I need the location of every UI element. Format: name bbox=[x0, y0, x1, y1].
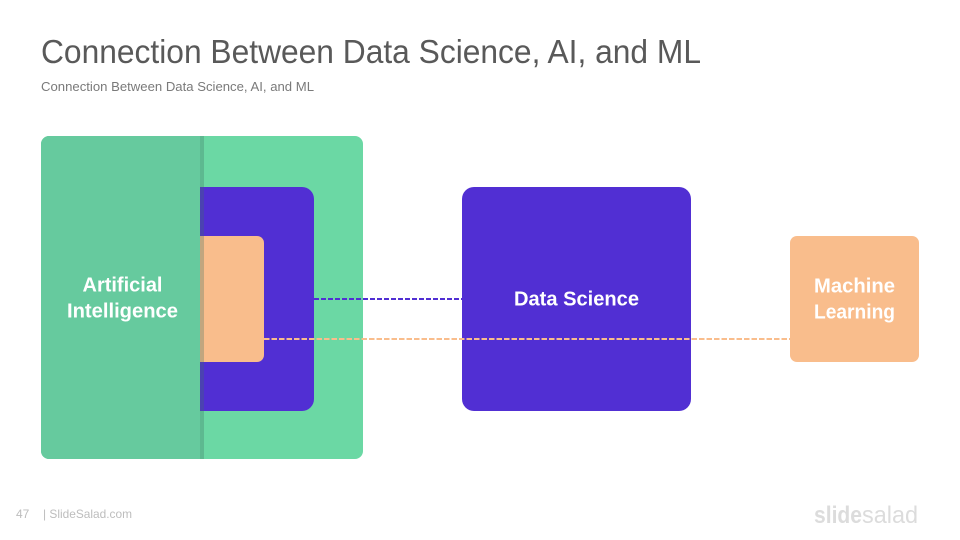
title: Connection Between Data Science, AI, and ML bbox=[41, 33, 701, 70]
logo wordmark: slide bbox=[814, 502, 862, 529]
connector: purple dashed line bbox=[314, 298, 462, 300]
label: data science: Data Science bbox=[514, 288, 639, 310]
shaded divider strip bbox=[200, 136, 204, 459]
label: artificial intelligence: Artificial bbox=[82, 274, 162, 296]
page number: 47 bbox=[16, 507, 30, 521]
connector: peach dashed line bbox=[264, 338, 790, 340]
label: machine learning: Machine bbox=[814, 276, 895, 298]
label: machine learning: Learning bbox=[814, 302, 895, 324]
inner purple box bbox=[200, 187, 314, 411]
left shaded panel bbox=[41, 136, 200, 459]
subtitle: Connection Between Data Science, AI, and ML bbox=[41, 80, 314, 94]
box: data science bbox=[462, 187, 691, 411]
footer source: | SlideSalad.com bbox=[43, 507, 132, 521]
box: machine learning bbox=[790, 236, 919, 362]
label: artificial intelligence: Intelligence bbox=[67, 300, 178, 322]
panel: nested diagram bbox=[41, 136, 363, 459]
inner peach box bbox=[200, 236, 264, 362]
logo wordmark: salad bbox=[862, 502, 918, 529]
outer green box bbox=[41, 136, 363, 459]
